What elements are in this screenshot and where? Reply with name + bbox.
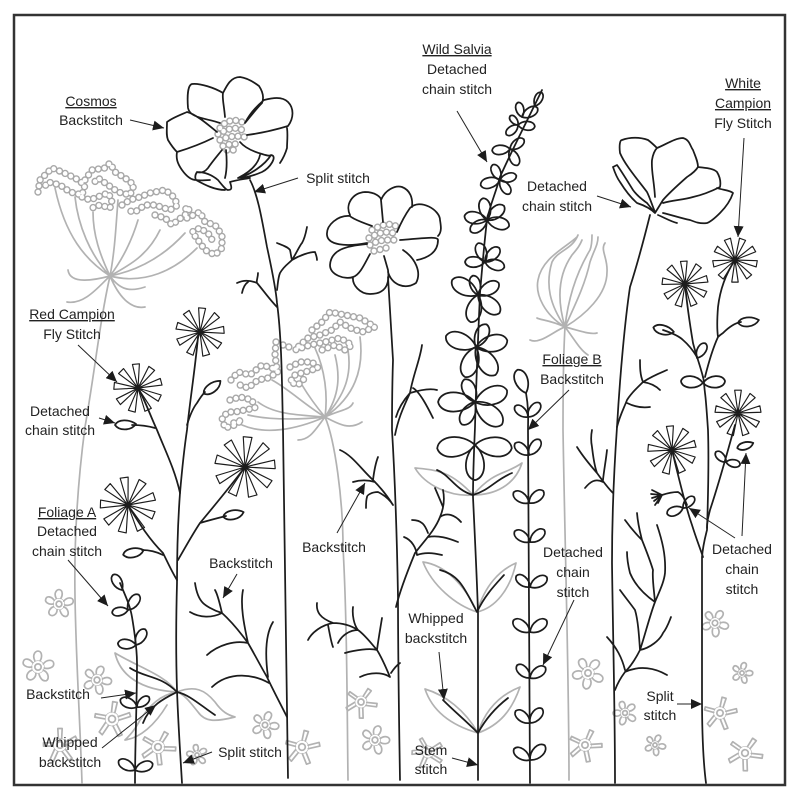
salvia whorls of detached chain petals xyxy=(436,91,545,480)
foliage A leaves and bracts xyxy=(109,572,215,775)
label: detached chain stitch, right cosmos xyxy=(522,178,631,214)
label: Foliage B xyxy=(528,351,604,430)
label: stem stitch: stitch xyxy=(415,761,447,777)
label: detached chain stitch, right xyxy=(689,453,772,597)
label: detached chain stitch, foliage B: stitch xyxy=(557,584,589,600)
label: backstitch, mid sprig xyxy=(302,483,366,555)
label: Foliage B: Foliage B xyxy=(542,351,602,367)
gray seed head and stem xyxy=(530,235,607,780)
fly stitch flowers xyxy=(97,232,763,536)
label: split stitch, right: Split xyxy=(646,688,674,704)
label: Split stitch, cosmos stem: Split stitch xyxy=(306,170,370,186)
label: detached chain stitch, right: stitch xyxy=(726,581,758,597)
campion leaves and buds xyxy=(115,316,759,559)
label: whipped backstitch, left xyxy=(39,705,156,770)
foliage B leaf pairs xyxy=(510,368,550,764)
label: detached chain stitch, bud: chain stitch xyxy=(25,422,95,438)
cosmos flower, upper left xyxy=(167,77,292,190)
label: White Campion xyxy=(714,75,772,237)
label: detached chain stitch, bud xyxy=(25,403,115,438)
label: backstitch, foliage stem xyxy=(26,686,136,702)
label: Cosmos xyxy=(59,93,164,128)
label: whipped backstitch, center: Whipped xyxy=(408,610,464,626)
label: stem stitch xyxy=(415,742,478,777)
label: Foliage B: Backstitch xyxy=(540,371,604,387)
label: detached chain stitch, right cosmos: Detached xyxy=(527,178,587,194)
label: Wild Salvia: Detached xyxy=(427,61,487,77)
gray leaves xyxy=(115,463,522,740)
label: White Campion: White xyxy=(725,75,761,91)
label: Cosmos: Backstitch xyxy=(59,112,123,128)
cosmos flower, center xyxy=(327,187,441,294)
label: whipped backstitch, center xyxy=(405,610,467,700)
black stems: cosmos, salvia, foliage and side sprigs xyxy=(120,90,741,783)
label: detached chain stitch, foliage B xyxy=(543,544,603,665)
gray background flowers xyxy=(23,590,768,776)
label: Red Campion xyxy=(29,306,117,382)
label: split stitch, right xyxy=(644,688,702,723)
label: whipped backstitch, left: backstitch xyxy=(39,754,101,770)
label: detached chain stitch, bud: Detached xyxy=(30,403,90,419)
label: White Campion: Campion xyxy=(715,95,771,111)
label: split stitch, bottom: Split stitch xyxy=(218,744,282,760)
label: detached chain stitch, foliage B: chain xyxy=(556,564,590,580)
gray umbel flower, center xyxy=(222,312,375,780)
label: detached chain stitch, right: chain xyxy=(725,561,759,577)
label: backstitch, center sprig: Backstitch xyxy=(209,555,273,571)
label: Red Campion: Fly Stitch xyxy=(43,326,101,342)
cosmos flower, right xyxy=(613,138,733,223)
label: detached chain stitch, foliage B: Detached xyxy=(543,544,603,560)
label: Split stitch, cosmos stem xyxy=(254,170,370,192)
label: stem stitch: Stem xyxy=(415,742,447,758)
label: split stitch, bottom xyxy=(183,744,282,763)
label: backstitch, center sprig xyxy=(209,555,273,598)
label: Foliage A: Detached xyxy=(37,523,97,539)
label: detached chain stitch, right: Detached xyxy=(712,541,772,557)
label: Foliage A xyxy=(32,504,108,606)
label: Wild Salvia: chain stitch xyxy=(422,81,492,97)
label: White Campion: Fly Stitch xyxy=(714,115,772,131)
label: Wild Salvia xyxy=(422,41,492,162)
label: whipped backstitch, left: Whipped xyxy=(42,734,98,750)
salvia stitched leaf veins xyxy=(437,470,512,733)
label: split stitch, right: stitch xyxy=(644,707,676,723)
label: Foliage A: chain stitch xyxy=(32,543,102,559)
gray umbel flower, upper left xyxy=(38,163,222,783)
label: Wild Salvia: Wild Salvia xyxy=(422,41,492,57)
label: Foliage A: Foliage A xyxy=(38,504,97,520)
label: backstitch, foliage stem: Backstitch xyxy=(26,686,90,702)
label: Red Campion: Red Campion xyxy=(29,306,115,322)
label: whipped backstitch, center: backstitch xyxy=(405,630,467,646)
label: detached chain stitch, right cosmos: chain stitch xyxy=(522,198,592,214)
label: Cosmos: Cosmos xyxy=(65,93,117,109)
label: backstitch, mid sprig: Backstitch xyxy=(302,539,366,555)
